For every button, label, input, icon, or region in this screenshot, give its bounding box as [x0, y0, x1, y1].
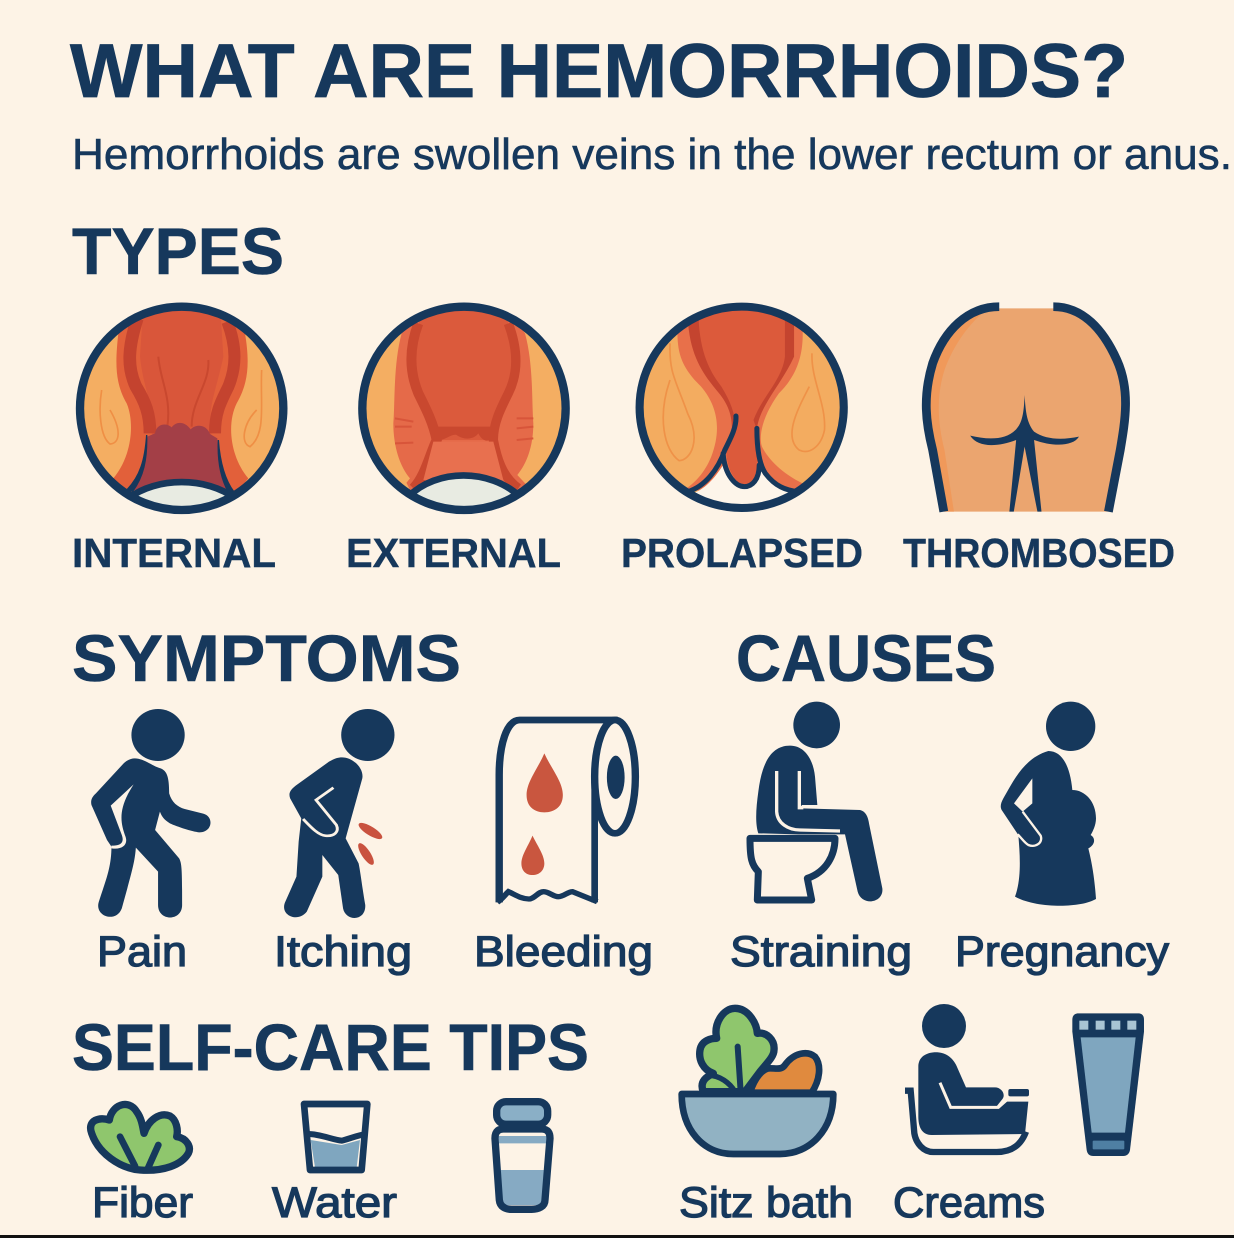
icon: itching figure: [284, 709, 394, 918]
label: fiber: Fiber: [92, 1179, 193, 1227]
icon: cream tube: [1072, 1013, 1144, 1156]
panel: types: [72, 303, 1175, 576]
label: creams: Creams: [893, 1179, 1045, 1227]
heading: causes: CAUSES: [736, 621, 996, 695]
icon: supplement jar: [495, 1102, 550, 1209]
icon: straining on toilet: [750, 702, 882, 901]
icon: pregnant figure: [1001, 702, 1096, 906]
icon: toilet paper with blood: [497, 720, 635, 902]
label: external: EXTERNAL: [346, 530, 561, 576]
icon: prolapsed hemorrhoid: [640, 303, 844, 517]
heading: types: TYPES: [72, 214, 284, 288]
label: pain: Pain: [97, 928, 187, 976]
label: sitz bath: Sitz bath: [679, 1179, 853, 1227]
label: pregnancy: Pregnancy: [955, 928, 1170, 976]
label: prolapsed: PROLAPSED: [621, 530, 863, 576]
icon: fiber leaf: [91, 1104, 189, 1170]
panel: causes: [730, 702, 1170, 976]
title: WHAT ARE HEMORRHOIDS?: [70, 29, 1128, 114]
icon: sitz bath figure: [905, 1004, 1029, 1152]
label: thrombosed: THROMBOSED: [903, 530, 1175, 576]
label: bleeding: Bleeding: [474, 928, 653, 976]
icon: pain figure: [91, 709, 210, 917]
label: water: Water: [272, 1179, 397, 1227]
heading: self-care tips: SELF-CARE TIPS: [72, 1010, 589, 1084]
icon: glass of water: [304, 1104, 367, 1170]
panel: self-care tips: [91, 1004, 1144, 1227]
panel: symptoms: [91, 709, 653, 976]
icon: salad bowl: [682, 1008, 833, 1154]
label: internal: INTERNAL: [72, 530, 276, 576]
icon: external hemorrhoid: [362, 303, 566, 517]
icon: thrombosed hemorrhoid: [926, 307, 1126, 512]
icon: internal hemorrhoid: [80, 303, 283, 517]
label: itching: Itching: [274, 928, 412, 976]
label: straining: Straining: [730, 928, 912, 976]
heading: symptoms: SYMPTOMS: [72, 621, 461, 695]
subtitle: Hemorrhoids are swollen veins in the lower rectum or anus.: [72, 130, 1232, 179]
